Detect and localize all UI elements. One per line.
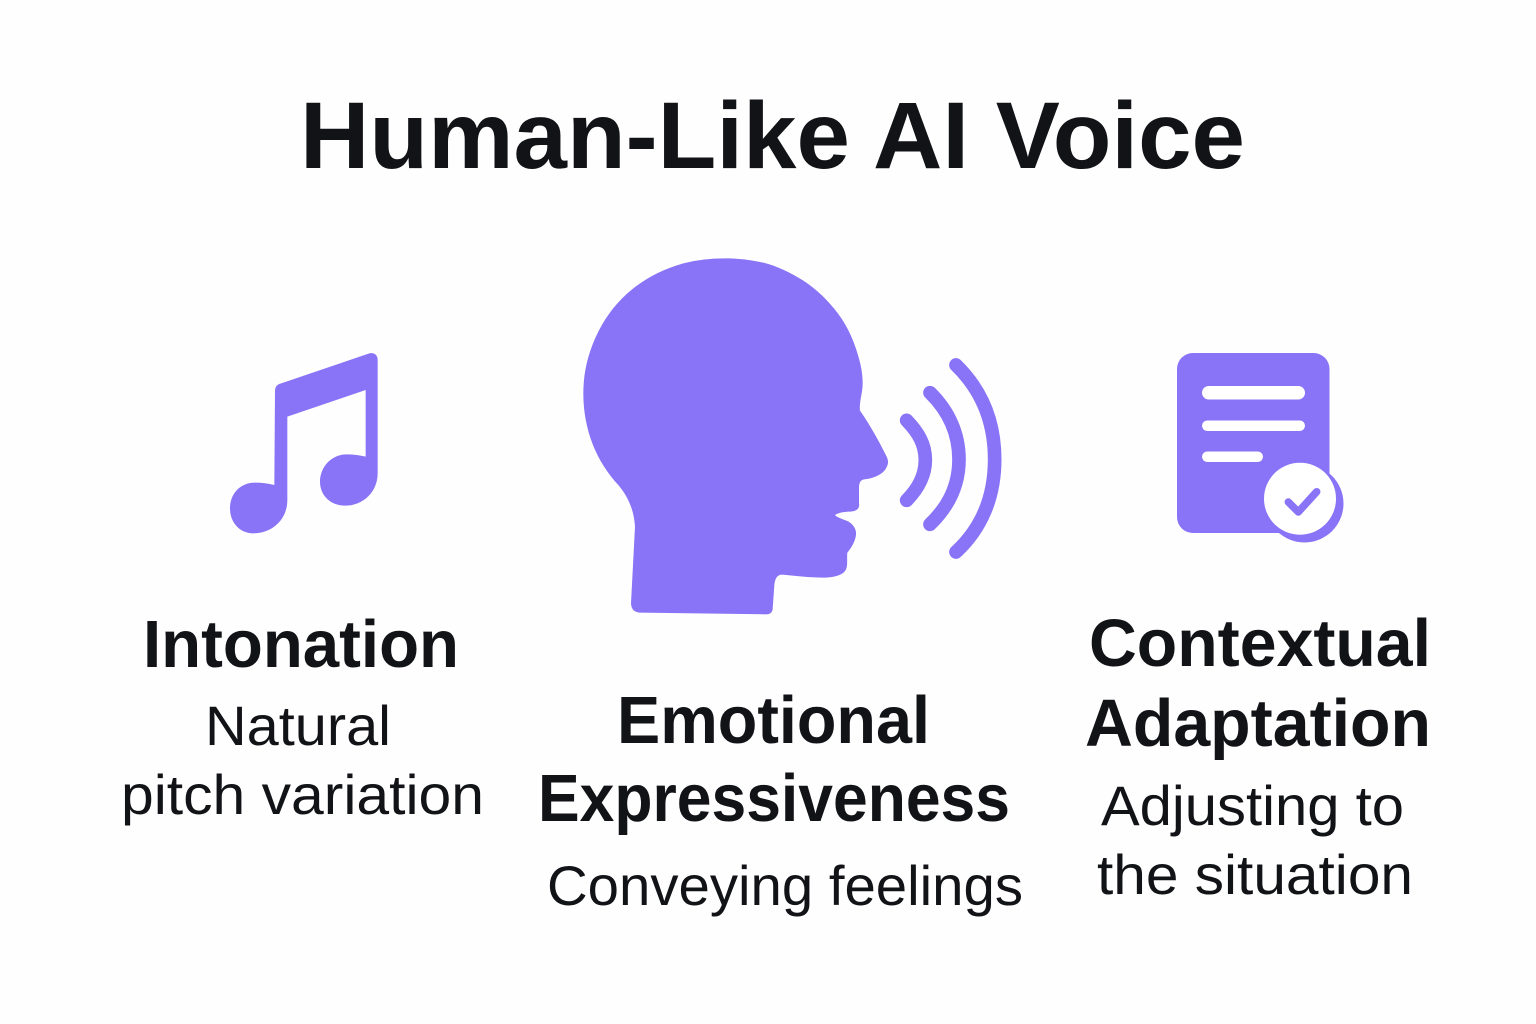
column: contextual adaptation xyxy=(1085,606,1431,906)
description: Adjusting to xyxy=(1101,774,1404,837)
document lines xyxy=(1202,386,1305,462)
heading: Emotional xyxy=(617,683,930,758)
column: emotional expressiveness xyxy=(538,683,1023,917)
head silhouette xyxy=(583,258,888,614)
heading: Adaptation xyxy=(1085,686,1431,761)
icon: music note xyxy=(230,353,378,533)
heading: Contextual xyxy=(1089,606,1431,681)
document page xyxy=(1177,353,1330,533)
column: intonation xyxy=(121,607,484,826)
sound waves xyxy=(907,365,995,552)
heading: Intonation xyxy=(143,607,459,682)
description: pitch variation xyxy=(121,763,484,826)
description: Natural xyxy=(205,694,391,757)
check badge xyxy=(1264,463,1344,542)
icon: document with check xyxy=(1177,353,1344,542)
title: Human-Like AI Voice xyxy=(300,83,1245,189)
description: the situation xyxy=(1097,843,1413,906)
heading: Expressiveness xyxy=(538,761,1010,836)
icon: speaking head xyxy=(583,258,995,614)
description: Conveying feelings xyxy=(547,854,1023,917)
